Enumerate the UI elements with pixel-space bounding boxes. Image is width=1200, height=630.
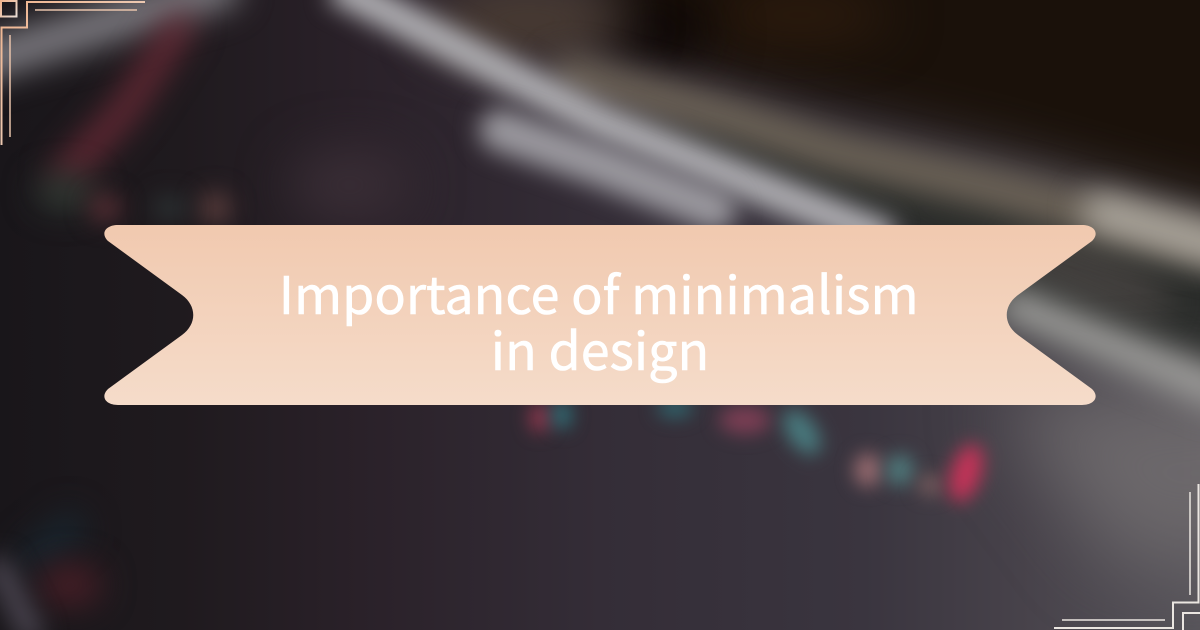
title: in design (491, 310, 709, 385)
ribbon banner (104, 225, 1096, 405)
corner frame: bottom right (1054, 484, 1200, 630)
corner frame: top left (1, 1, 145, 145)
title: Importance of minimalism (279, 254, 919, 329)
